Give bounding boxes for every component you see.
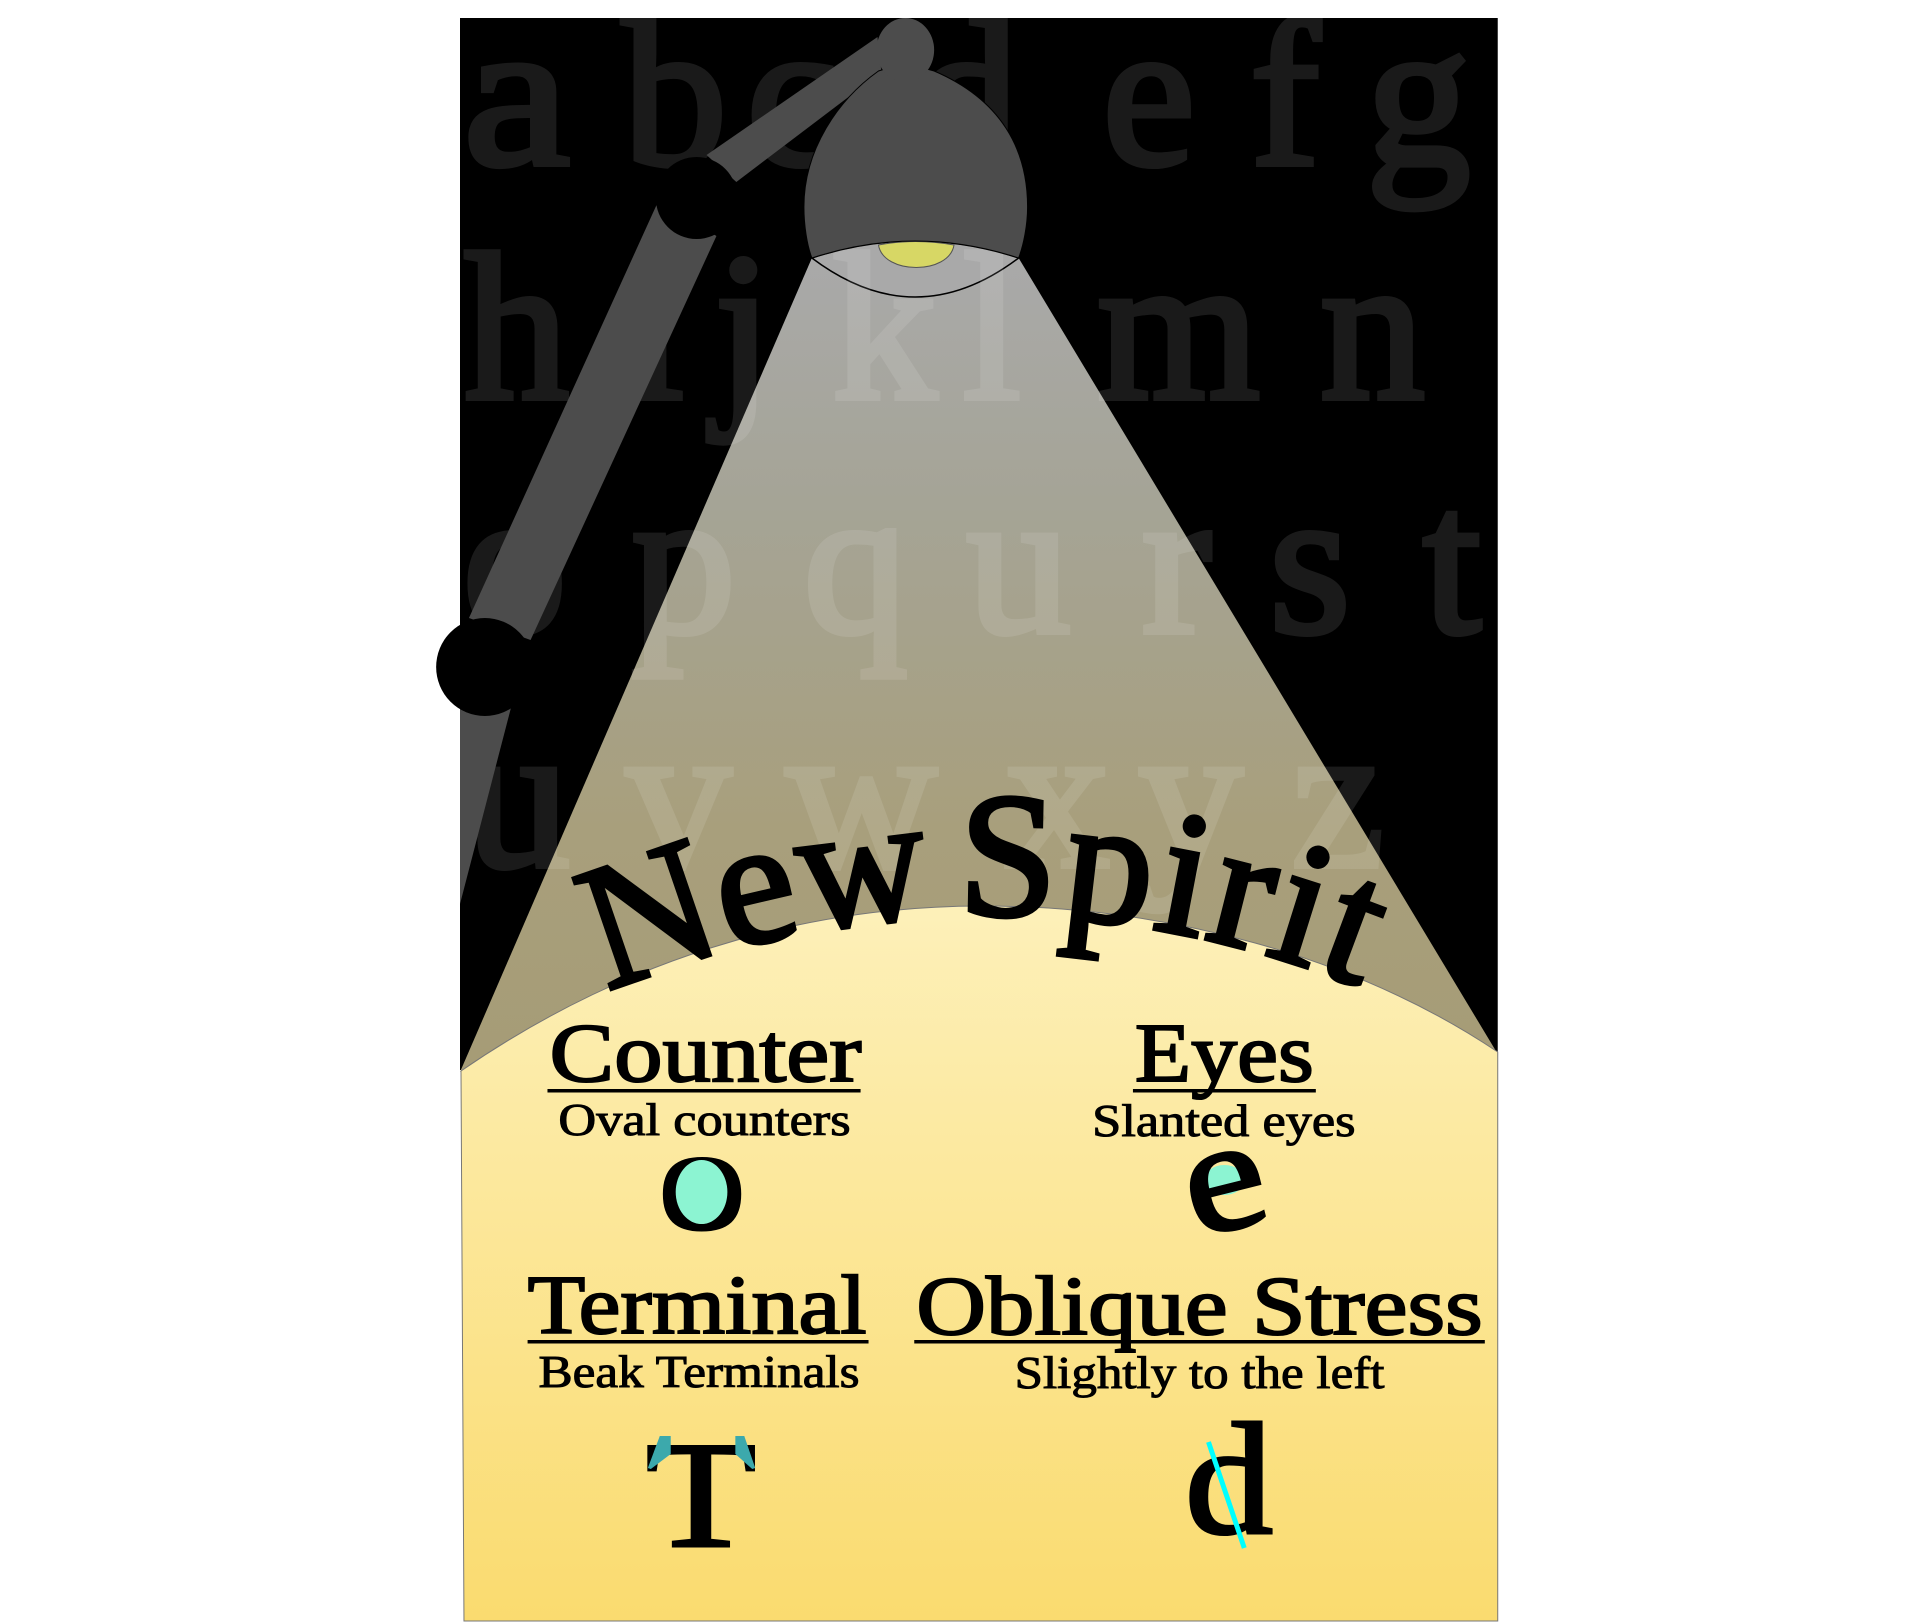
background alphabet: y — [1138, 679, 1243, 912]
background alphabet: z — [1291, 679, 1384, 912]
background alphabet: u — [465, 679, 570, 912]
background alphabet: r — [1142, 445, 1211, 678]
background alphabet: k — [832, 211, 937, 444]
title: New Spirit: New Spirit — [571, 795, 1388, 992]
heading: Eyes: Eyes — [1135, 1007, 1314, 1100]
background alphabet: x — [1005, 679, 1110, 912]
background alphabet: o — [462, 445, 567, 678]
heading underline: Counter — [547, 1089, 861, 1092]
background alphabet: n — [1320, 211, 1425, 444]
letter: T: T — [646, 1411, 756, 1579]
background alphabet: p — [631, 445, 736, 678]
light beam — [460, 258, 1498, 1072]
lamp head — [804, 18, 1028, 258]
background alphabet: t — [1423, 445, 1481, 678]
feature: oblique stress — [914, 1260, 1485, 1568]
feature: terminal — [528, 1259, 869, 1579]
background alphabet: u — [966, 445, 1071, 678]
background alphabet: v — [626, 679, 731, 912]
lamp knob — [876, 18, 934, 82]
arm: middle segment — [469, 200, 716, 640]
heading underline: Terminal — [528, 1340, 869, 1344]
description: Slanted eyes: Slanted eyes — [1092, 1096, 1356, 1146]
arm: upper segment — [707, 37, 881, 182]
letter: o: o — [656, 1093, 748, 1264]
background alphabet: w — [786, 679, 937, 912]
highlight: oval counter — [676, 1160, 727, 1224]
arm: lower segment — [460, 700, 512, 904]
heading: Terminal: Terminal — [528, 1259, 867, 1352]
background alphabet: q — [803, 445, 908, 678]
background alphabet: h — [464, 211, 569, 444]
dark background panel — [460, 18, 1498, 1070]
arm joint: lower — [436, 618, 534, 716]
heading underline: Oblique Stress — [914, 1340, 1485, 1344]
arm joint: upper — [656, 157, 737, 239]
description: Oval counters: Oval counters — [558, 1095, 851, 1145]
background alphabet: l — [963, 211, 1021, 444]
background alphabet — [462, 0, 1481, 912]
feature: counter — [547, 1007, 862, 1264]
feature: eyes — [1092, 1007, 1356, 1272]
heading: Counter: Counter — [549, 1007, 862, 1100]
background alphabet: s — [1269, 445, 1350, 678]
highlight: left beak — [648, 1436, 671, 1469]
lit area dome — [461, 906, 1498, 1621]
description: Beak Terminals: Beak Terminals — [539, 1347, 860, 1397]
description: Slightly to the left: Slightly to the left — [1015, 1348, 1385, 1398]
background alphabet: j — [707, 211, 772, 444]
highlight: stress axis — [1208, 1442, 1244, 1548]
lamp hood — [804, 66, 1028, 258]
letter: e: e — [1161, 1080, 1283, 1272]
heading underline: Eyes — [1133, 1089, 1316, 1092]
background alphabet: i — [626, 211, 684, 444]
background alphabet: m — [1097, 211, 1260, 444]
letter: d: d — [1185, 1391, 1273, 1568]
lamp arm — [436, 37, 881, 904]
poster artwork — [436, 0, 1498, 1622]
highlight: right beak — [735, 1436, 755, 1469]
highlight: slanted eye — [1205, 1165, 1244, 1195]
lamp bulb — [878, 242, 954, 268]
lamp lens — [812, 241, 1019, 297]
heading: Oblique Stress: Oblique Stress — [916, 1260, 1483, 1353]
